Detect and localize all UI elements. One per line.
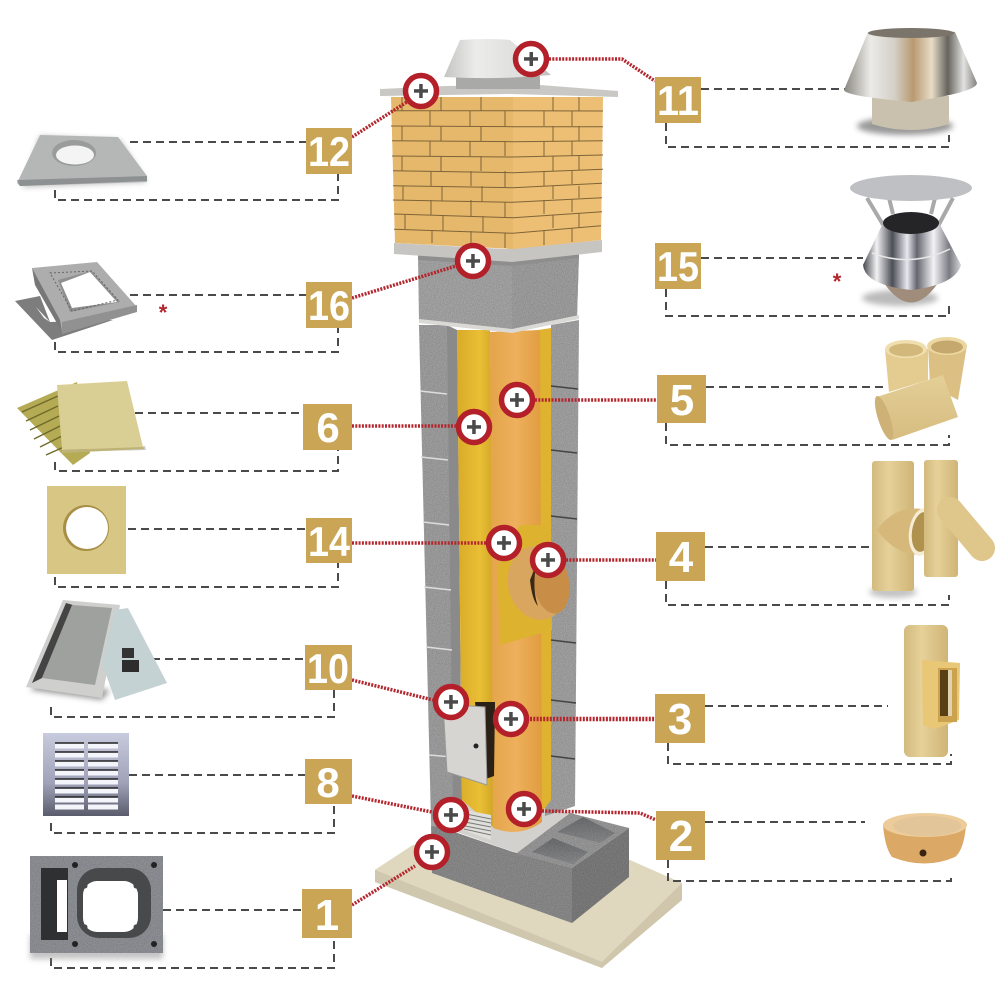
product 2: condensate bowl [883,813,967,864]
dashed leaders [51,89,951,968]
cover plate [497,525,552,645]
collar slab [394,240,602,262]
badge 4 [656,532,705,582]
badge 11: 11 [657,77,699,124]
marker 6 [458,412,490,442]
badge 1: 1 [315,891,339,940]
badge 8: 8 [316,759,340,806]
badge 14: 14 [308,518,351,565]
badge 3 [655,694,705,744]
badge 3: 3 [668,695,692,744]
foundation slab [375,845,682,968]
marker 11 [516,44,546,74]
marker 3 [496,704,526,734]
right block column [545,320,579,816]
cap slab [380,85,618,97]
product 3: inspection tee [904,625,960,757]
marker 12 [406,76,436,106]
connector pipe [501,541,575,625]
asterisk left: * [159,300,168,325]
product 12: concrete cap slab [17,135,147,187]
product 15: rain cap [850,175,972,306]
marker 2 [508,794,540,824]
badge 6: 6 [316,404,340,451]
product 5: ceramic tubes [871,337,967,442]
badge 6 [303,404,352,451]
left column inner shade [447,326,462,810]
product 11: steel cowl [844,28,977,135]
plinth plate [431,795,570,853]
vent grille [463,810,491,840]
badge 4: 4 [669,533,694,582]
marker 1 [416,836,448,868]
brick stack [391,97,603,249]
badge 5: 5 [670,376,694,425]
right insulation [538,328,551,812]
product 8: chrome grille [43,733,129,816]
badge 16: 16 [308,282,350,329]
marker 4 [532,544,564,576]
asterisk right: * [833,269,842,294]
badge 5 [657,375,706,425]
cowl [444,39,551,78]
badge 10: 10 [307,645,349,692]
lower collar [419,315,579,333]
product 10: steel door [26,600,167,700]
marker 8 [436,800,466,830]
badge 12: 12 [308,128,350,175]
tube base [431,800,462,829]
marker 14 [488,528,520,558]
badge 8 [305,759,352,806]
marker 10 [436,686,466,718]
marker 16 [458,246,488,276]
connector lines [352,59,657,905]
left block column [419,325,462,830]
soot door [443,702,495,785]
cowl base [456,74,540,89]
collar shadow [418,253,579,266]
product 14: insulation square [47,486,126,574]
block joints [420,386,578,759]
badge 15: 15 [657,243,699,290]
badge 1 [302,889,352,940]
flue tube [490,330,542,832]
base block [431,813,629,923]
chimney illustration [375,39,682,968]
product 6: mineral wool boards [17,381,146,465]
product 4: ceramic tees [869,460,982,598]
product 1: chimney block [30,856,163,959]
badge 2: 2 [669,812,693,861]
marker 5 [502,384,532,416]
left insulation [457,330,495,828]
upper block [418,254,579,332]
badge 2 [656,811,705,861]
product 16: concrete frame [15,262,137,340]
